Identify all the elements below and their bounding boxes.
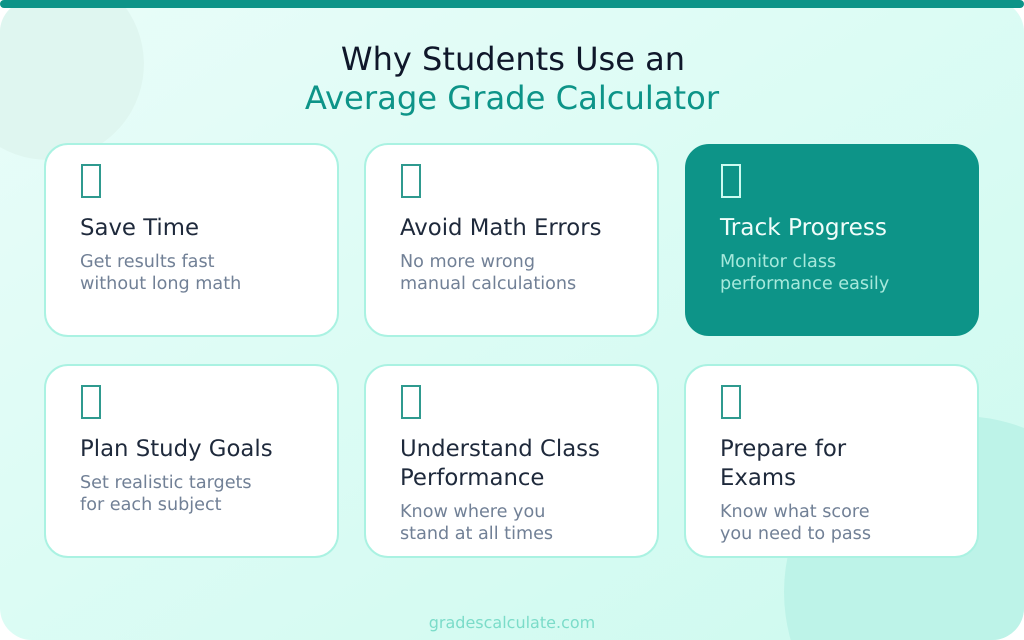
card: track progress highlighted (685, 144, 979, 336)
card description (80, 252, 241, 294)
card heading: Performance (400, 465, 544, 491)
card: avoid math errors (364, 143, 658, 337)
card heading: Prepare for (720, 436, 846, 462)
title: Why Students Use an (341, 40, 685, 78)
card description (720, 502, 871, 544)
card heading: Plan Study Goals (80, 436, 273, 462)
footer website: gradescalculate.com (429, 613, 595, 632)
icon: missing glyph box (81, 164, 101, 198)
card description: manual calculations (400, 274, 576, 294)
card description: Set realistic targets (80, 473, 252, 493)
card description: for each subject (80, 495, 222, 515)
card heading: Avoid Math Errors (400, 215, 601, 241)
icon: missing glyph box (401, 385, 421, 419)
card description (720, 252, 889, 294)
icon: missing glyph box (721, 164, 741, 198)
card description: Know where you (400, 502, 545, 522)
card description: you need to pass (720, 524, 871, 544)
card heading (720, 436, 846, 491)
card heading: Track Progress (720, 214, 887, 241)
card description (400, 502, 553, 544)
card heading: Save Time (80, 215, 199, 241)
icon: missing glyph box (81, 385, 101, 419)
card heading: Exams (720, 465, 796, 491)
title (305, 40, 720, 117)
card description: performance easily (720, 274, 889, 294)
card heading (400, 436, 600, 491)
card: prepare for exams (684, 364, 979, 558)
card heading: Understand Class (400, 436, 600, 462)
card description: Get results fast (80, 252, 215, 272)
top accent bar (0, 0, 1024, 8)
card description: stand at all times (400, 524, 553, 544)
card: save time (44, 143, 338, 337)
icon: missing glyph box (721, 385, 741, 419)
card description: Know what score (720, 502, 870, 522)
card: plan study goals (44, 364, 338, 558)
card description (400, 252, 576, 294)
card description: without long math (80, 274, 241, 294)
title: Average Grade Calculator (305, 79, 719, 117)
icon: missing glyph box (401, 164, 421, 198)
card: understand class performance (364, 364, 658, 558)
card description (80, 473, 252, 515)
card description: Monitor class (720, 252, 836, 272)
card description: No more wrong (400, 252, 535, 272)
